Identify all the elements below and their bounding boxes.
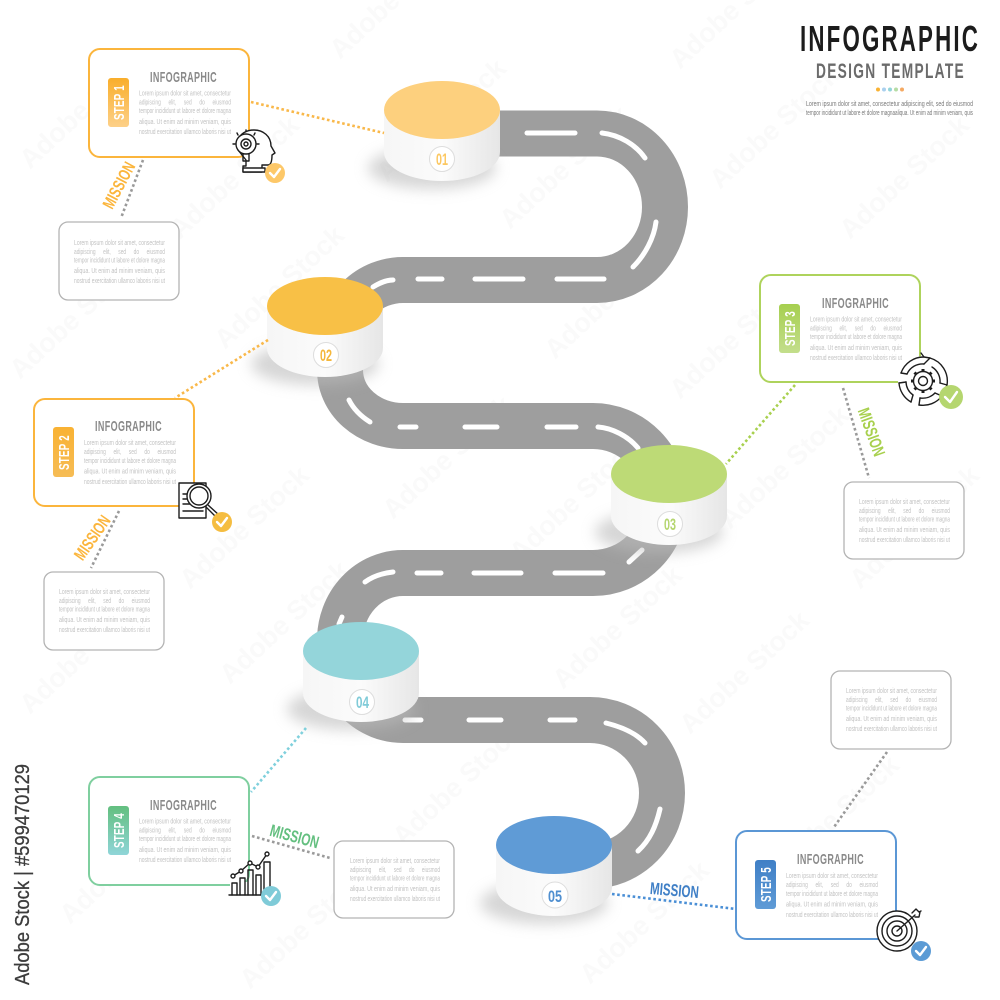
mission box: [334, 841, 454, 918]
connector: mission: [834, 752, 887, 827]
card text: nostrud exercitation ullamco laboris nisi ut: [139, 857, 231, 864]
card text: [810, 316, 902, 362]
card heading: INFOGRAPHIC: [95, 418, 162, 435]
watermark pattern: Adobe Stock: [764, 749, 905, 884]
mission label: MISSION: [649, 879, 700, 902]
step badge: STEP 1: [111, 85, 128, 120]
mission box: aliqua. Ut enim ad minim veniam, quis: [74, 268, 165, 275]
watermark pattern: Adobe Stock: [674, 604, 815, 739]
connector: cylinder to card: [251, 728, 306, 792]
card text: [84, 440, 176, 486]
mission label: MISSION: [854, 405, 889, 459]
watermark pattern: Adobe Stock: [834, 109, 975, 244]
mission box: Lorem ipsum dolor sit amet, consectetur: [74, 240, 165, 247]
card text: aliqua. Ut enim ad minim veniam, quis: [84, 468, 176, 476]
icon: gear with circular arrows: [898, 353, 948, 406]
card heading: INFOGRAPHIC: [822, 295, 889, 312]
mission label: MISSION: [70, 512, 115, 564]
icon: document with magnifier: [179, 483, 219, 518]
watermark pattern: Adobe Stock: [234, 859, 375, 994]
step badge: STEP 3: [782, 311, 799, 346]
watermark pattern: Adobe Stock: [14, 39, 155, 174]
icon: check badge: [212, 512, 232, 532]
watermark pattern: Adobe Stock: [209, 219, 350, 354]
cylinder 05: [480, 816, 612, 924]
watermark pattern: Adobe Stock: [664, 269, 805, 404]
icon: check badge: [911, 941, 931, 961]
mission box: Lorem ipsum dolor sit amet, consectetur: [59, 589, 150, 596]
card text: adipiscing elit, sed do eiusmod: [84, 449, 176, 456]
step badge: [53, 427, 74, 477]
card heading: INFOGRAPHIC: [150, 69, 217, 86]
card heading: INFOGRAPHIC: [797, 851, 864, 868]
card text: nostrud exercitation ullamco laboris nisi ut: [810, 355, 902, 362]
cylinder 01: [368, 81, 500, 189]
cylinder 03: 03: [664, 515, 676, 534]
mission box: aliqua. Ut enim ad minim veniam, quis: [859, 527, 950, 534]
mission box: nostrud exercitation ullamco laboris nisi ut: [859, 537, 950, 544]
step badge: [779, 304, 800, 353]
watermark pattern: Adobe Stock: [14, 584, 155, 719]
card text: Lorem ipsum dolor sit amet, consectetur: [84, 440, 176, 447]
mission box: aliqua. Ut enim ad minim veniam, quis: [350, 886, 440, 893]
card: [89, 49, 249, 157]
mission box: aliqua. Ut enim ad minim veniam, quis: [846, 716, 937, 723]
watermark pattern: Adobe Stock: [214, 554, 355, 689]
icon: head with lightbulb: [233, 130, 275, 172]
step 3 group: [726, 275, 964, 559]
cylinder 03: [595, 445, 727, 553]
mission box: adipiscing elit, sed do eiusmod: [74, 249, 165, 256]
watermark pattern: Adobe Stock: [174, 459, 315, 594]
step badge: [108, 78, 129, 127]
mission box: tempor incididunt ut labore et dolore magna: [350, 876, 440, 882]
colour dots: [876, 88, 904, 92]
connector: cylinder to card: [612, 894, 736, 909]
mission box: Lorem ipsum dolor sit amet, consectetur: [859, 499, 950, 506]
mission box: adipiscing elit, sed do eiusmod: [59, 598, 150, 605]
mission box: tempor incididunt ut labore et dolore magna: [859, 516, 950, 524]
mission box: tempor incididunt ut labore et dolore magna: [74, 258, 165, 264]
card text: tempor incididunt ut labore et dolore magna: [84, 458, 176, 465]
step badge: STEP 5: [758, 867, 775, 902]
watermark pattern: Adobe Stock: [714, 399, 855, 534]
step badge: STEP 4: [111, 813, 128, 848]
watermark pattern: Adobe Stock: [387, 716, 528, 851]
connector: mission: [252, 836, 330, 858]
mission box: [831, 671, 951, 749]
cylinder 01: 01: [436, 150, 448, 169]
mission box: adipiscing elit, sed do eiusmod: [846, 697, 937, 704]
card text: aliqua. Ut enim ad minim veniam, quis: [139, 847, 231, 854]
watermark pattern: Adobe Stock: [494, 99, 635, 234]
icon: check badge: [261, 886, 281, 906]
cylinder 02: [251, 277, 383, 385]
card text: tempor incididunt ut labore et dolore magna: [139, 836, 231, 843]
watermark pattern: Adobe Stock: [504, 432, 645, 567]
card text: tempor incididunt ut labore et dolore magna: [139, 108, 231, 115]
mission box: aliqua. Ut enim ad minim veniam, quis: [59, 617, 150, 624]
icon: target with arrow: [877, 909, 921, 951]
watermark pattern: Adobe Stock: [54, 794, 195, 929]
mission label: MISSION: [268, 821, 321, 852]
mission box: nostrud exercitation ullamco laboris nisi ut: [350, 896, 440, 903]
icon: check badge: [939, 385, 963, 409]
mission box: nostrud exercitation ullamco laboris nisi ut: [74, 278, 165, 285]
card text: [139, 90, 231, 136]
icon: bar chart with trend: [229, 852, 271, 895]
watermark pattern: Adobe Stock: [377, 389, 518, 524]
connector: mission: [121, 160, 143, 218]
card text: adipiscing elit, sed do eiusmod: [810, 326, 902, 332]
step 5 group: [612, 671, 951, 961]
card text: tempor incididunt ut labore et dolore magna: [810, 334, 902, 341]
watermark pattern: Adobe Stock: [539, 229, 680, 364]
cylinder 02: 02: [320, 346, 332, 365]
mission box: Lorem ipsum dolor sit amet, consectetur: [846, 688, 937, 695]
header description: [806, 101, 973, 117]
card text: nostrud exercitation ullamco laboris nisi ut: [139, 129, 231, 136]
card text: Lorem ipsum dolor sit amet, consectetur: [139, 818, 231, 826]
mission box: [844, 482, 964, 559]
mission box: adipiscing elit, sed do eiusmod: [350, 867, 440, 874]
watermark pattern: Adobe Stock: [704, 59, 845, 194]
mission box: [44, 572, 164, 650]
card text: [786, 873, 878, 919]
mission box: [59, 222, 179, 300]
step badge: [108, 806, 129, 855]
mission box: tempor incididunt ut labore et dolore magna: [846, 706, 937, 712]
card text: aliqua. Ut enim ad minim veniam, quis: [139, 119, 231, 126]
step 1 group: [59, 49, 384, 300]
watermark pattern: Adobe Stock: [164, 109, 305, 244]
card text: adipiscing elit, sed do eiusmod: [786, 882, 878, 889]
card text: Lorem ipsum dolor sit amet, consectetur: [139, 90, 231, 98]
mission box: nostrud exercitation ullamco laboris nisi ut: [59, 627, 150, 634]
step badge: [755, 860, 776, 909]
connector: mission: [91, 511, 119, 568]
card: [736, 831, 896, 939]
cylinder 05: 05: [548, 887, 562, 906]
icon: check badge: [265, 163, 285, 183]
card text: Lorem ipsum dolor sit amet, consectetur: [786, 873, 878, 880]
card text: aliqua. Ut enim ad minim veniam, quis: [810, 345, 902, 352]
step 2 group: [34, 340, 268, 650]
winding road: [339, 133, 665, 866]
card text: nostrud exercitation ullamco laboris nisi ut: [786, 912, 878, 919]
card text: aliqua. Ut enim ad minim veniam, quis: [786, 902, 878, 908]
watermark pattern: Adobe Stock: [371, 52, 512, 187]
watermark pattern: Adobe Stock: [574, 854, 715, 989]
step badge: STEP 2: [56, 435, 73, 470]
connector: cylinder to card: [251, 102, 384, 133]
card heading: INFOGRAPHIC: [150, 797, 217, 814]
stock id side label: Adobe Stock | #599470129: [12, 764, 34, 985]
watermark pattern: Adobe Stock: [4, 249, 145, 384]
cylinder 04: 04: [356, 693, 369, 712]
card text: tempor incididunt ut labore et dolore magna: [786, 891, 878, 898]
mission box: Lorem ipsum dolor sit amet, consectetur: [350, 858, 440, 865]
card text: adipiscing elit, sed do eiusmod: [139, 828, 231, 834]
card: [89, 777, 249, 885]
mission box: adipiscing elit, sed do eiusmod: [859, 508, 950, 515]
card: [760, 275, 920, 382]
connector: cylinder to card: [726, 385, 795, 464]
mission label: MISSION: [99, 159, 139, 212]
connector: cylinder to card: [175, 340, 268, 398]
connector: mission: [843, 388, 869, 478]
step 4 group: [89, 728, 454, 918]
watermark pattern: Adobe Stock: [844, 459, 985, 594]
card text: adipiscing elit, sed do eiusmod: [139, 100, 231, 106]
card text: [139, 818, 231, 864]
card text: Lorem ipsum dolor sit amet, consectetur: [810, 316, 902, 324]
watermark pattern: Adobe Stock: [547, 559, 688, 694]
card: [34, 399, 194, 506]
cylinder 04: [287, 622, 419, 730]
card text: nostrud exercitation ullamco laboris nisi ut: [84, 479, 176, 486]
title block: [800, 18, 980, 117]
road centre dashes: [339, 133, 660, 851]
mission box: tempor incididunt ut labore et dolore magna: [59, 606, 150, 614]
mission box: nostrud exercitation ullamco laboris nisi ut: [846, 726, 937, 733]
